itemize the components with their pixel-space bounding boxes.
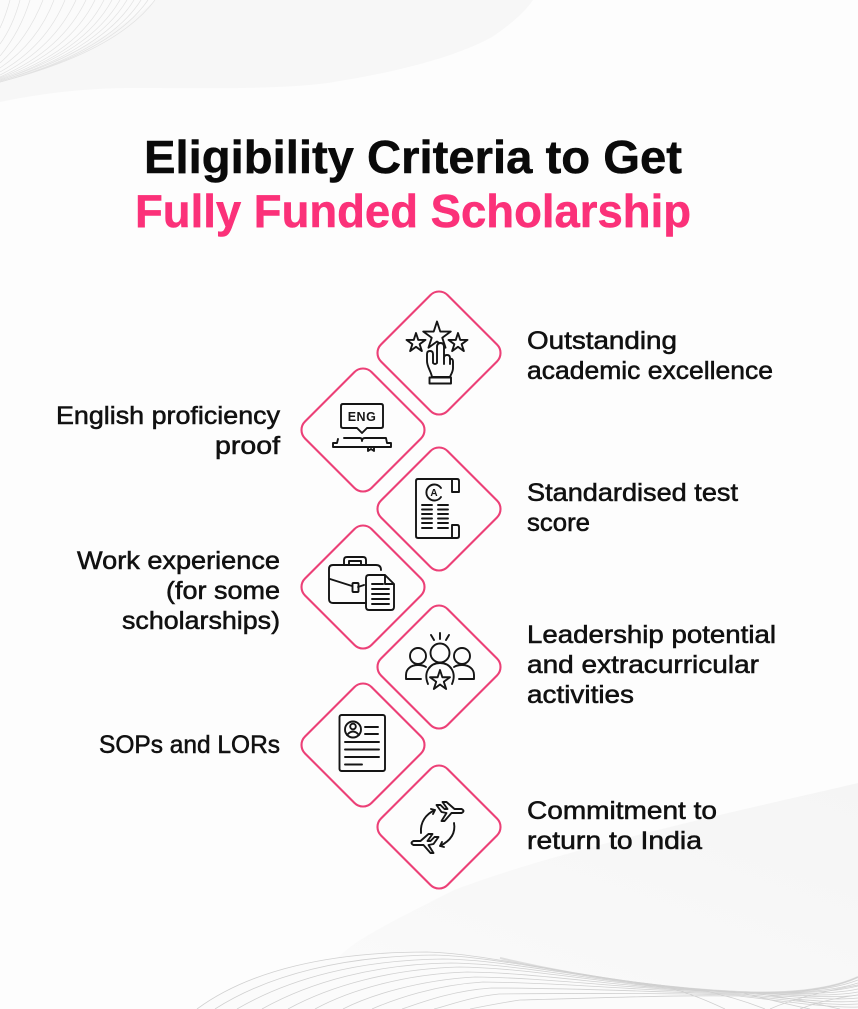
text: Outstanding academic excellence: Outstanding [527, 327, 677, 355]
title [135, 131, 691, 237]
text: Outstanding academic excellence [527, 327, 773, 385]
text: Standardised test score: Standardised test [527, 479, 738, 507]
title line 1: Eligibility Criteria to Get [144, 131, 682, 183]
text: SOPs and LORs: SOPs and LORs [99, 731, 280, 759]
text: Work experience: Work experience [77, 547, 280, 575]
icon: ENG speech bubble over book: ENG [348, 410, 376, 424]
text: Leadership potential: and extracurricular [527, 651, 759, 679]
text: Leadership potential [527, 621, 776, 709]
text: Leadership potential: Leadership potential [527, 621, 776, 649]
panel: Leadership potential diamond [373, 601, 505, 733]
panel: Commitment to return to India diamond [373, 761, 505, 893]
text: Outstanding academic excellence: academic excellence [527, 357, 773, 385]
text: Commitment to return to India [527, 797, 717, 855]
text: Work experience [77, 547, 280, 635]
background: bottom wave [197, 783, 858, 1009]
icon: team with star [406, 633, 474, 689]
text: Work experience: scholarships) [122, 607, 280, 635]
panel: English proficiency diamond [297, 364, 429, 496]
text: Commitment to return to India: return to India [527, 827, 702, 855]
icon: hand touching stars [406, 322, 468, 384]
text: Leadership potential: activities [527, 681, 634, 709]
text: Standardised test score [527, 479, 738, 537]
icon: briefcase and document [329, 557, 394, 610]
panel: Work experience diamond [297, 521, 429, 653]
icon: profile document [340, 715, 385, 771]
panel: SOPs and LORs diamond [297, 679, 429, 811]
icon: planes and circular arrows [412, 802, 464, 853]
text: Standardised test score: score [527, 509, 590, 537]
panel: Outstanding academic excellence diamond [373, 287, 505, 419]
panel: Standardised test score diamond [373, 443, 505, 575]
text: Work experience: (for some [166, 577, 280, 605]
text: Commitment to return to India: Commitment to [527, 797, 717, 825]
background: top-left wave [0, 0, 533, 102]
text: English proficiency proof [56, 402, 281, 460]
icon: graded test scroll: A [430, 488, 438, 499]
text: English proficiency proof: proof [215, 432, 280, 460]
text: English proficiency proof: English proficiency [56, 402, 281, 430]
title line 2: Fully Funded Scholarship [135, 185, 691, 237]
